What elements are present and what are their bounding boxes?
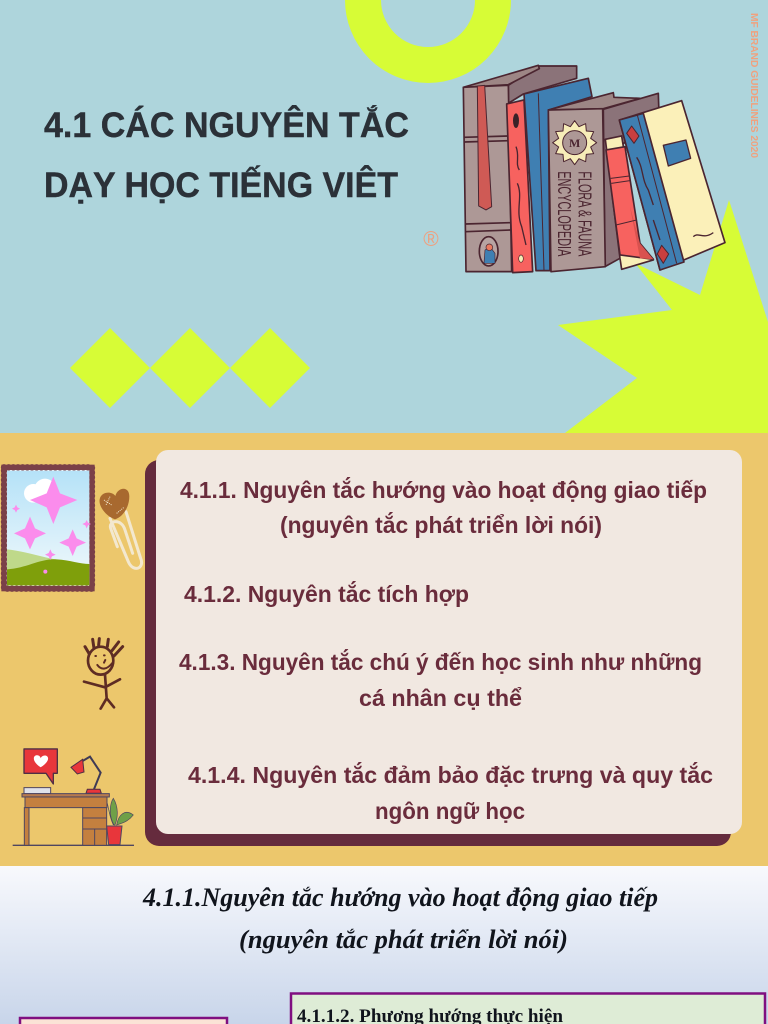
principles text: 4.1.3. Nguyên tắc chú ý đến học sinh như những	[179, 648, 702, 675]
icon: child stick figure	[84, 639, 123, 709]
decorative diamonds	[70, 328, 310, 408]
principles text	[179, 476, 713, 824]
icon: stack of books: M	[569, 136, 580, 150]
green box	[291, 994, 765, 1024]
panel: section detail	[0, 866, 768, 1024]
icon: stack of books: ENCYCLOPEDIA	[554, 171, 575, 257]
section heading: (nguyên tắc phát triển lời nói)	[239, 925, 568, 954]
section heading: 4.1.1.Nguyên tắc hướng vào hoạt động giao tiếp	[142, 883, 658, 912]
title: 4.1 CÁC NGUYÊN TẮC	[44, 105, 409, 145]
vertical brand label: MF BRAND GUIDELINES 2020	[748, 13, 759, 158]
decorative starburst	[558, 200, 768, 433]
section heading	[142, 883, 658, 954]
principles text: 4.1.4. Nguyên tắc đảm bảo đặc trưng và quy tắc	[188, 761, 713, 788]
principles text: 4.1.1. Nguyên tắc hướng vào hoạt động giao tiếp	[180, 476, 707, 503]
principles text: cá nhân cụ thể	[359, 685, 522, 711]
icon: stack of books: FLORA & FAUNA	[574, 171, 595, 257]
title	[44, 105, 409, 205]
panel: header	[0, 0, 768, 433]
icon: framed picture with sparkles	[4, 467, 92, 589]
icon: desk with lamp, plant and speech bubble	[13, 749, 134, 845]
title: DẠY HỌC TIẾNG VIÊT	[44, 165, 398, 205]
icon: heart paper clip	[100, 489, 142, 568]
pink box	[20, 1018, 227, 1024]
icon: stack of books	[463, 65, 725, 273]
principles text: (nguyên tắc phát triển lời nói)	[280, 511, 602, 538]
panel: principles list	[0, 433, 768, 866]
decorative yellow ring	[363, 0, 493, 65]
principles text: ngôn ngữ học	[375, 798, 525, 824]
principles text: 4.1.2. Nguyên tắc tích hợp	[184, 580, 469, 607]
card	[156, 450, 742, 834]
registered mark: ®	[423, 228, 439, 251]
card shadow	[145, 460, 731, 846]
